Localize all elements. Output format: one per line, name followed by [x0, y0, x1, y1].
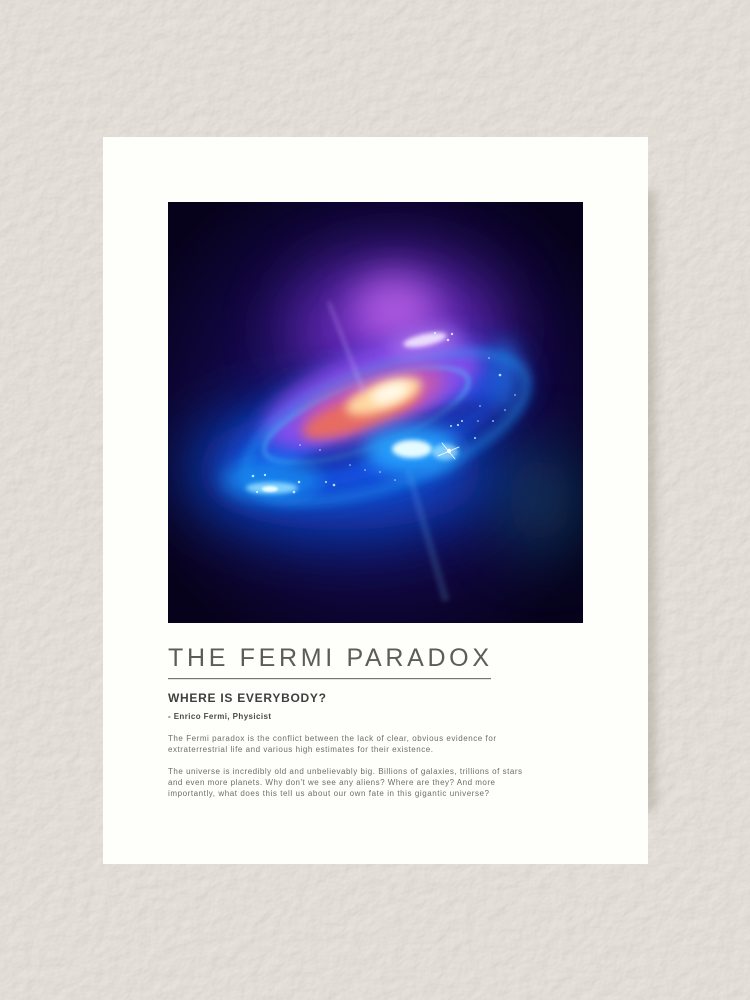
paragraph two [168, 767, 522, 798]
paper shadow [642, 190, 654, 810]
sparkle star [438, 443, 459, 459]
galaxy disc [220, 327, 542, 513]
light rays [327, 301, 450, 602]
small stars [252, 332, 516, 493]
paragraph one: extraterrestrial life and various high estimates for their existence. [168, 745, 433, 754]
paragraph one [168, 734, 496, 754]
paragraph one: The Fermi paradox is the conflict between the lack of clear, obvious evidence for [168, 734, 496, 743]
paragraph two: The universe is incredibly old and unbelievably big. Billions of galaxies, trillions of stars [168, 767, 522, 776]
deep space glow [190, 260, 575, 550]
bright star clusters [222, 321, 519, 501]
paragraph two: importantly, what does this tell us about our own fate in this gigantic universe? [168, 789, 490, 798]
title: THE FERMI PARADOX [168, 644, 489, 672]
paper sheet [103, 137, 648, 864]
title rule [168, 678, 491, 679]
subtitle: WHERE IS EVERYBODY? [168, 691, 326, 705]
paragraph two: and even more planets. Why don't we see any aliens? Where are they? And more [168, 778, 496, 787]
galaxy image [168, 202, 583, 623]
attribution: - Enrico Fermi, Physicist [168, 712, 271, 721]
